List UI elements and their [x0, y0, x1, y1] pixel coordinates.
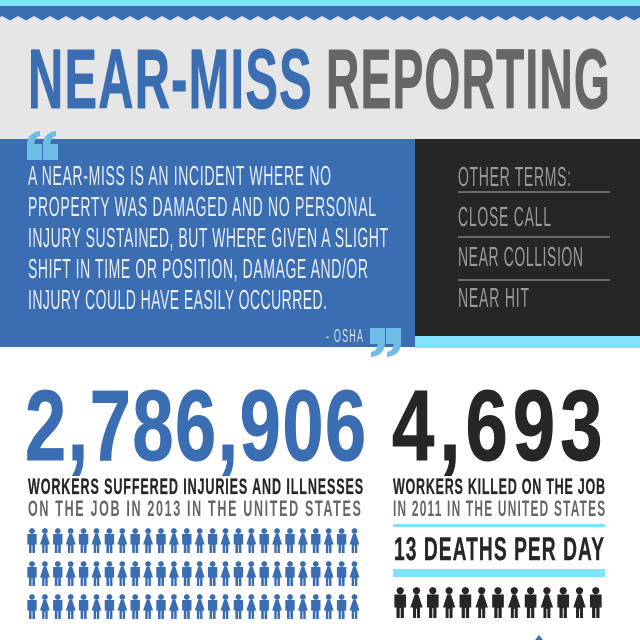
stat: workers killed: 4,693: [392, 370, 603, 481]
attribution: - OSHA: [326, 327, 363, 347]
panel: other terms: CLOSE CALL: [458, 201, 551, 232]
title: [28, 32, 610, 127]
callout: 13 deaths per day: 13 DEATHS PER DAY: [394, 531, 604, 567]
stat: injuries and illnesses: WORKERS SUFFERED INJURIES AND ILLNESSES: [28, 474, 363, 499]
quote text: INJURY SUSTAINED, BUT WHERE GIVEN A SLIGHT: [28, 222, 388, 253]
stat: workers killed: IN 2011 IN THE UNITED STATES: [393, 496, 605, 521]
icon: closing quote mark: [370, 328, 401, 357]
quote text: SHIFT IN TIME OR POSITION, DAMAGE AND/OR: [28, 253, 368, 284]
quote text: [28, 160, 388, 315]
panel: definition quote: [0, 139, 415, 347]
pictogram: blue workers: [27, 528, 360, 619]
panel: other terms: NEAR HIT: [458, 282, 529, 313]
stat: injuries and illnesses: ON THE JOB IN 2013 IN THE UNITED STATES: [28, 496, 361, 521]
stat: injuries and illnesses: 2,786,906: [25, 369, 366, 482]
quote text: PROPERTY WAS DAMAGED AND NO PERSONAL: [28, 191, 376, 222]
title: REPORTING: [326, 34, 610, 127]
pictogram: 13 black workers: [394, 587, 602, 618]
panel: other terms: OTHER TERMS:: [458, 161, 571, 192]
quote text: INJURY COULD HAVE EASILY OCCURRED.: [28, 284, 327, 315]
panel: other terms: [415, 139, 640, 348]
arrow tip: [535, 635, 543, 640]
header band: [0, 0, 640, 139]
panel: other terms: NEAR COLLISION: [458, 241, 583, 272]
quote text: A NEAR-MISS IS AN INCIDENT WHERE NO: [28, 160, 331, 191]
title: NEAR-MISS: [28, 32, 312, 126]
stat: workers killed: WORKERS KILLED ON THE JOB: [393, 474, 605, 499]
callout: 13 deaths per day: [393, 524, 605, 577]
icon: opening quote mark: [27, 131, 58, 160]
